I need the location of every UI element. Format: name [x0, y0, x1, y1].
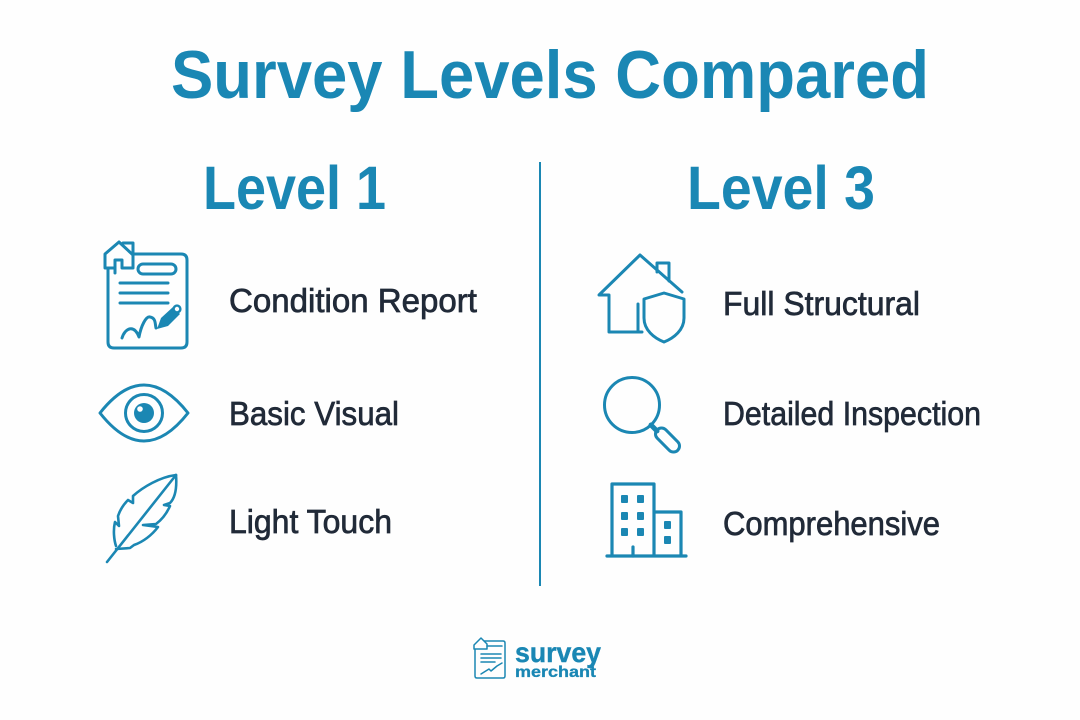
wordmark: survey [515, 637, 601, 668]
label: condition report: Condition Report [229, 282, 477, 319]
label: light touch: Light Touch [229, 503, 392, 540]
label: basic visual: Basic Visual [229, 395, 399, 432]
logo: survey merchant [474, 637, 601, 681]
icon: logo document [474, 638, 505, 678]
label: comprehensive: Comprehensive [723, 505, 940, 542]
icon: condition report document [105, 242, 187, 348]
icon: feather [107, 475, 176, 562]
icon: magnifying glass [604, 378, 682, 454]
label: full structural: Full Structural [723, 285, 920, 322]
heading: level 3: Level 3 [687, 154, 875, 222]
icon: buildings [607, 484, 686, 556]
icon: eye [100, 385, 188, 441]
label: detailed inspection: Detailed Inspection [723, 395, 981, 432]
title: Survey Levels Compared [171, 37, 929, 113]
heading: level 1: Level 1 [203, 154, 386, 222]
wordmark [515, 637, 601, 681]
panel: level 1 [100, 154, 477, 562]
wordmark: merchant [515, 664, 597, 681]
icon: house with shield [599, 255, 684, 342]
panel: level 3 [599, 154, 981, 556]
